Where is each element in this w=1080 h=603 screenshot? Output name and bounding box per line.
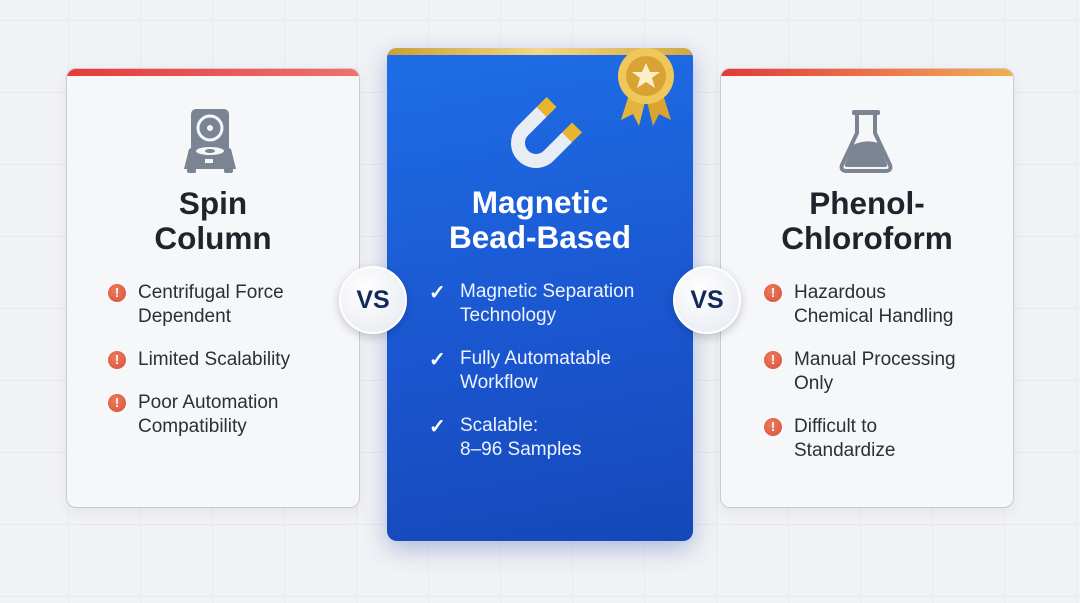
vs badge right [673, 266, 741, 334]
panel: spin column: Poor Automation [138, 392, 278, 413]
panel: spin column: Dependent [138, 306, 231, 327]
panel: phenol-chloroform: Difficult to [794, 416, 877, 437]
panel: phenol-chloroform: Manual Processing [794, 349, 956, 370]
panel: spin column: Limited Scalability [138, 349, 290, 370]
heading [154, 185, 272, 256]
vs badge left: VS [356, 286, 390, 314]
panel: magnetic bead-based [387, 48, 693, 541]
list: cons [764, 282, 956, 461]
panel: spin column: Compatibility [138, 416, 247, 437]
panel: magnetic bead-based: Scalable: [460, 415, 538, 436]
panel: magnetic bead-based: ✓ [429, 416, 446, 438]
panel: magnetic bead-based: Workflow [460, 372, 538, 393]
vs badge right: VS [690, 286, 724, 314]
list: cons [108, 282, 290, 437]
heading: Column [154, 220, 272, 256]
panel: phenol-chloroform [720, 68, 1014, 508]
icon: award badge [618, 48, 674, 126]
heading [781, 185, 953, 256]
panel: spin column: Centrifugal Force [138, 282, 284, 303]
panel: spin column: ! [115, 285, 119, 300]
heading: Chloroform [781, 220, 953, 256]
panel: magnetic bead-based: ✓ [429, 282, 446, 304]
panel: phenol-chloroform: ! [771, 285, 775, 300]
panel: phenol-chloroform: Chemical Handling [794, 306, 953, 327]
list: pros [429, 281, 634, 460]
panel: magnetic bead-based: Technology [460, 305, 556, 326]
panel: phenol-chloroform: Hazardous [794, 282, 886, 303]
vs badge left [339, 266, 407, 334]
panel: magnetic bead-based: Fully Automatable [460, 348, 611, 369]
panel: magnetic bead-based: ✓ [429, 349, 446, 371]
panel: spin column [66, 68, 360, 508]
heading [449, 184, 631, 255]
heading: Magnetic [472, 184, 608, 220]
panel: spin column: ! [115, 395, 119, 410]
heading: Spin [179, 185, 247, 221]
heading: Phenol- [809, 185, 925, 221]
panel: phenol-chloroform: ! [771, 352, 775, 367]
heading: Bead-Based [449, 219, 631, 255]
panel: phenol-chloroform: Standardize [794, 440, 895, 461]
panel: magnetic bead-based: 8–96 Samples [460, 439, 581, 460]
connector line right [656, 301, 726, 302]
panel: magnetic bead-based: Magnetic Separation [460, 281, 634, 302]
panel: phenol-chloroform: ! [771, 419, 775, 434]
panel: spin column: ! [115, 352, 119, 367]
icon: flask [840, 110, 892, 173]
panel: phenol-chloroform: Only [794, 373, 833, 394]
connector line left [322, 301, 392, 302]
icon: centrifuge [184, 109, 236, 173]
icon: magnet [511, 97, 582, 168]
